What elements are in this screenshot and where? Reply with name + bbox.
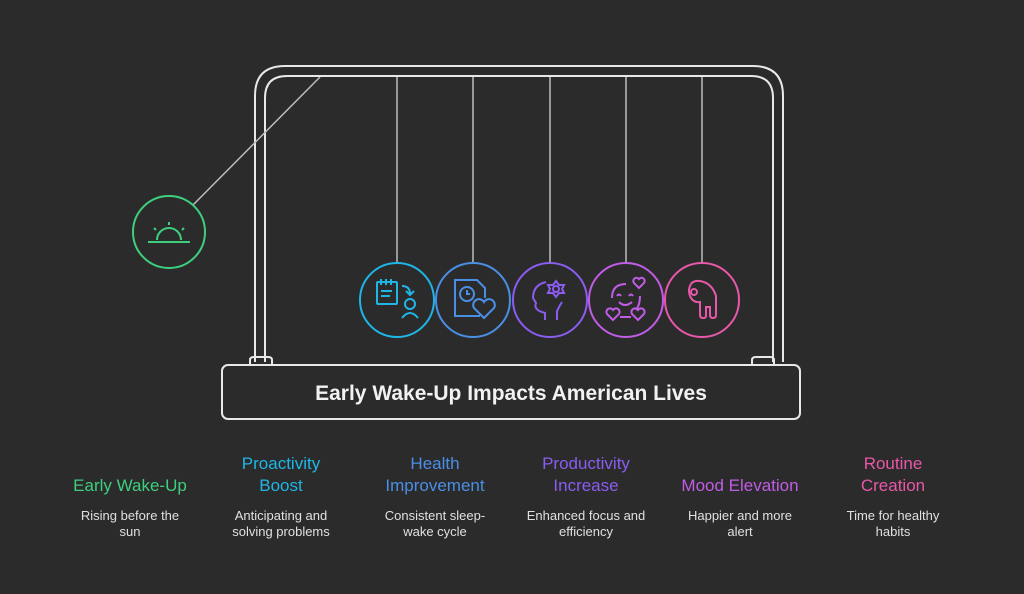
label: health	[385, 454, 485, 539]
icon: proactivity	[360, 263, 434, 337]
label: health: Consistent sleep-	[385, 508, 485, 523]
icon: productivity	[513, 263, 587, 337]
label: health: Improvement	[385, 476, 485, 495]
icon: mood	[589, 263, 663, 337]
label: proactivity: Proactivity	[242, 454, 321, 473]
label: mood: Mood Elevation	[681, 476, 799, 495]
icon: sunrise	[133, 196, 205, 268]
icon: routine	[665, 263, 739, 337]
label: mood: alert	[727, 524, 753, 539]
label: early wake-up: Early Wake-Up	[73, 476, 187, 495]
label: early wake-up: Rising before the	[81, 508, 179, 523]
label: routine: Creation	[861, 476, 925, 495]
label: proactivity: Boost	[259, 476, 303, 495]
strings	[193, 77, 702, 263]
label: health: wake cycle	[402, 524, 467, 539]
frame: newton's cradle stand	[250, 66, 783, 365]
label: productivity: efficiency	[559, 524, 613, 539]
label: early wake-up: sun	[120, 524, 140, 539]
label: routine	[847, 454, 940, 539]
label: routine: Routine	[864, 454, 922, 473]
label: early wake-up	[73, 476, 187, 539]
label: proactivity	[232, 454, 330, 539]
title base: Early Wake-Up Impacts American Lives	[315, 382, 707, 405]
label: health: Health	[410, 454, 460, 473]
label: routine: Time for healthy	[847, 508, 940, 523]
label: mood: Happier and more	[688, 508, 792, 523]
title base	[222, 365, 800, 419]
label: proactivity: Anticipating and	[235, 508, 327, 523]
label: productivity: Increase	[553, 476, 619, 495]
label: proactivity: solving problems	[232, 524, 330, 539]
label: productivity	[527, 454, 645, 539]
label: productivity: Enhanced focus and	[527, 508, 645, 523]
icon: health	[436, 263, 510, 337]
label: mood	[681, 476, 799, 539]
label: productivity: Productivity	[542, 454, 630, 473]
label: routine: habits	[876, 524, 911, 539]
